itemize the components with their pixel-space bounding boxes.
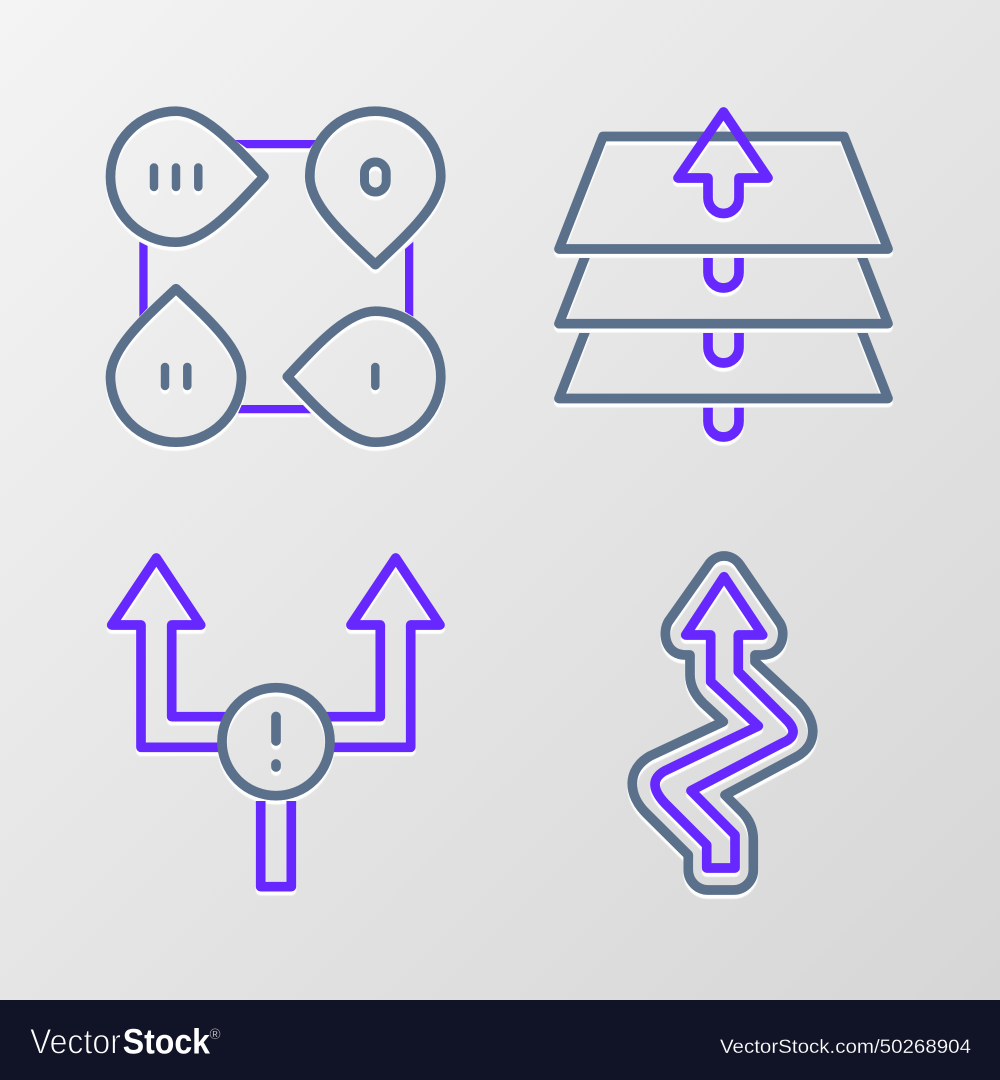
icon: forked arrows with warning circle	[112, 558, 440, 887]
grey outer outline	[632, 556, 813, 890]
registered mark: ®	[210, 1026, 221, 1043]
left arrow	[112, 558, 226, 747]
stem	[261, 801, 291, 887]
arrow segment behind third layer	[708, 333, 739, 363]
bottom layer	[559, 319, 888, 398]
purple inner arrow	[655, 577, 793, 868]
pin: one bar	[287, 311, 441, 442]
icon: four teardrop pins around a square	[110, 111, 441, 442]
middle layer	[559, 244, 888, 324]
pin: two bars	[110, 289, 242, 442]
pin: zero	[310, 111, 441, 265]
arrow segment below stack	[708, 408, 739, 437]
purple square segments	[139, 140, 413, 413]
arrow segment behind second layer	[708, 258, 739, 288]
up arrow head and stem	[678, 112, 768, 213]
exclamation mark	[271, 716, 281, 767]
top layer	[559, 136, 888, 249]
warning circle	[222, 688, 330, 796]
footer logo wordmark: VectorStock	[30, 1022, 210, 1062]
right arrow	[326, 558, 440, 747]
icon: stacked layers with up arrow	[559, 112, 888, 437]
footer image id: VectorStock.com/50268904	[720, 1036, 971, 1058]
icon: winding road arrow	[632, 556, 813, 890]
pin: three bars	[110, 111, 264, 242]
footer bar	[0, 1000, 1000, 1080]
